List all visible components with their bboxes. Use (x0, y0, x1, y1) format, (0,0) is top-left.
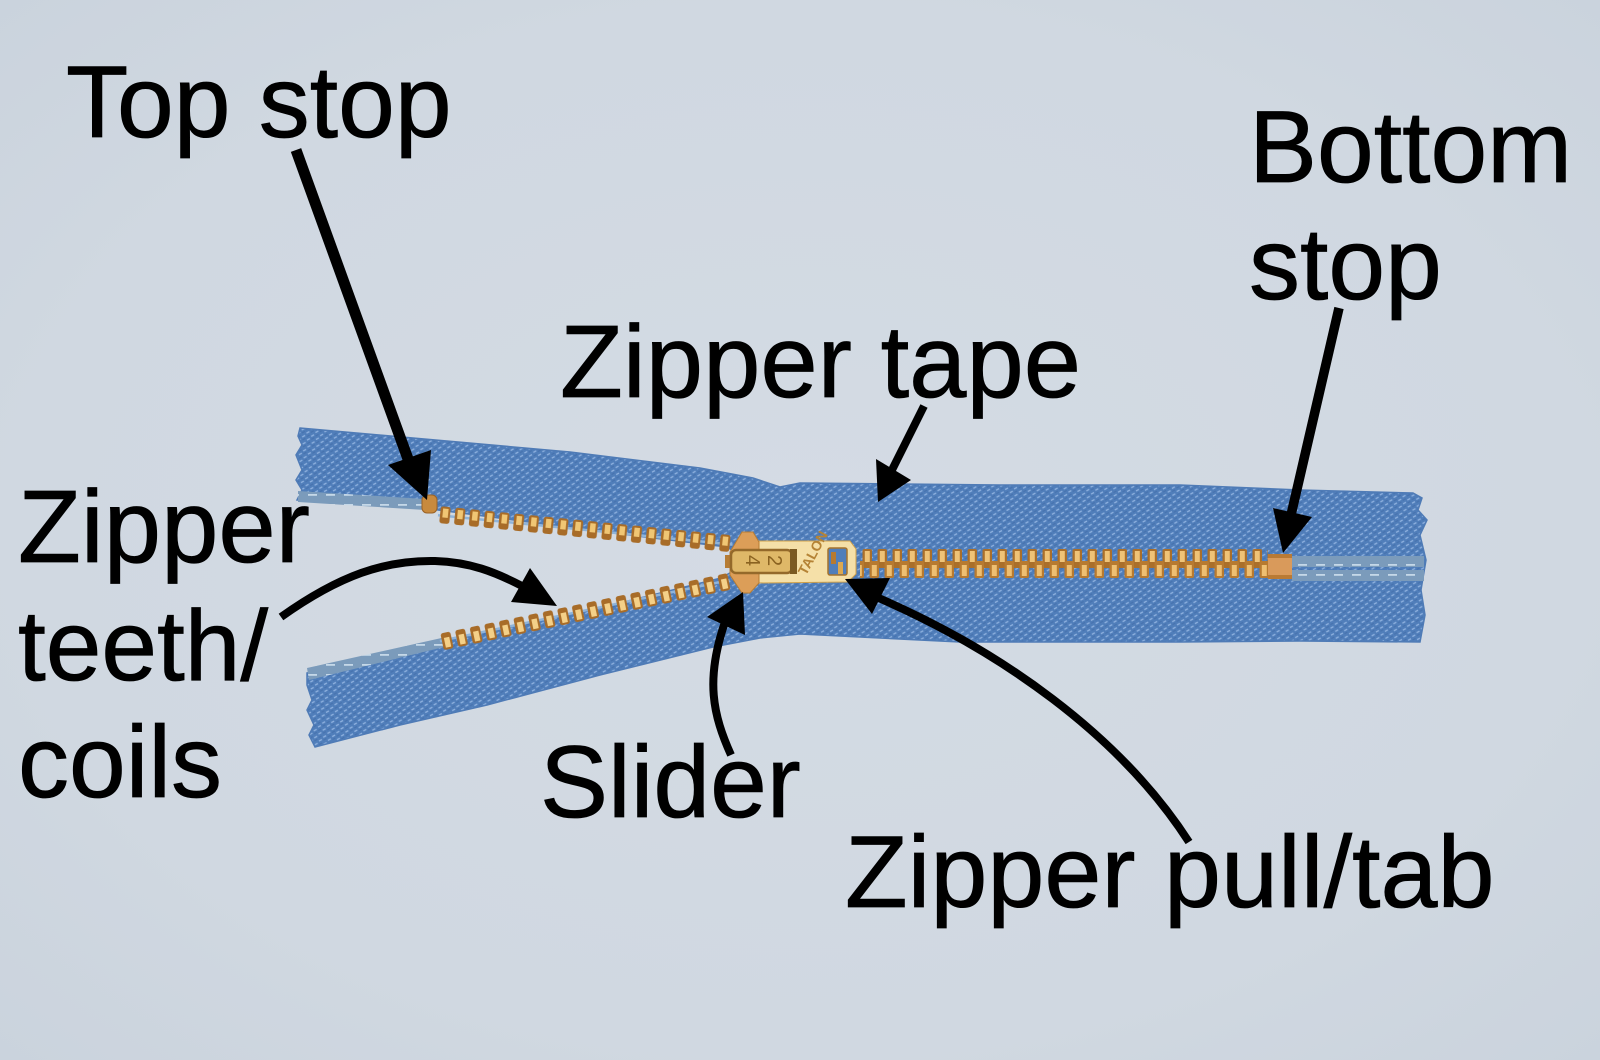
slider lettering: 2: 2 (763, 555, 785, 566)
label: top stop: Top stop (66, 45, 452, 159)
zipper (296, 428, 1427, 747)
zipper teeth: right closed section (860, 548, 1268, 578)
tab lettering: TALON (795, 528, 831, 577)
zipper pull/tab (757, 528, 856, 583)
label: zipper teeth/coils: Zipper (18, 469, 310, 584)
label: zipper teeth/coils: coils (18, 705, 222, 819)
zipper teeth: upper row (437, 505, 734, 554)
arrow: slider (707, 592, 745, 755)
zipper tape: exposed stitching, upper strand (298, 491, 425, 510)
zipper tape: exposed stitching, lower strand (307, 637, 448, 680)
slider (725, 532, 797, 593)
slider lettering: 4: 4 (741, 555, 763, 566)
label: bottom stop: Bottom (1249, 90, 1572, 204)
label: slider: Slider (540, 725, 801, 839)
arrow: zipper pull (845, 578, 1189, 842)
zipper teeth: lower row (438, 571, 732, 652)
arrow: zipper teeth (281, 561, 557, 617)
label: zipper teeth/coils: teeth/ (18, 590, 268, 702)
zipper tape: exposed stitching, right side (1292, 556, 1424, 581)
arrow: zipper tape (876, 406, 924, 502)
label: zipper tape: Zipper tape (560, 304, 1081, 419)
zipper tape: fabric band (296, 428, 1427, 747)
label: zipper pull/tab: Zipper pull/tab (845, 814, 1495, 929)
label: bottom stop: stop (1249, 207, 1442, 321)
arrow: bottom stop (1273, 308, 1339, 553)
arrow: top stop (296, 150, 431, 500)
bottom stop (1268, 554, 1292, 579)
top stop (422, 495, 437, 513)
